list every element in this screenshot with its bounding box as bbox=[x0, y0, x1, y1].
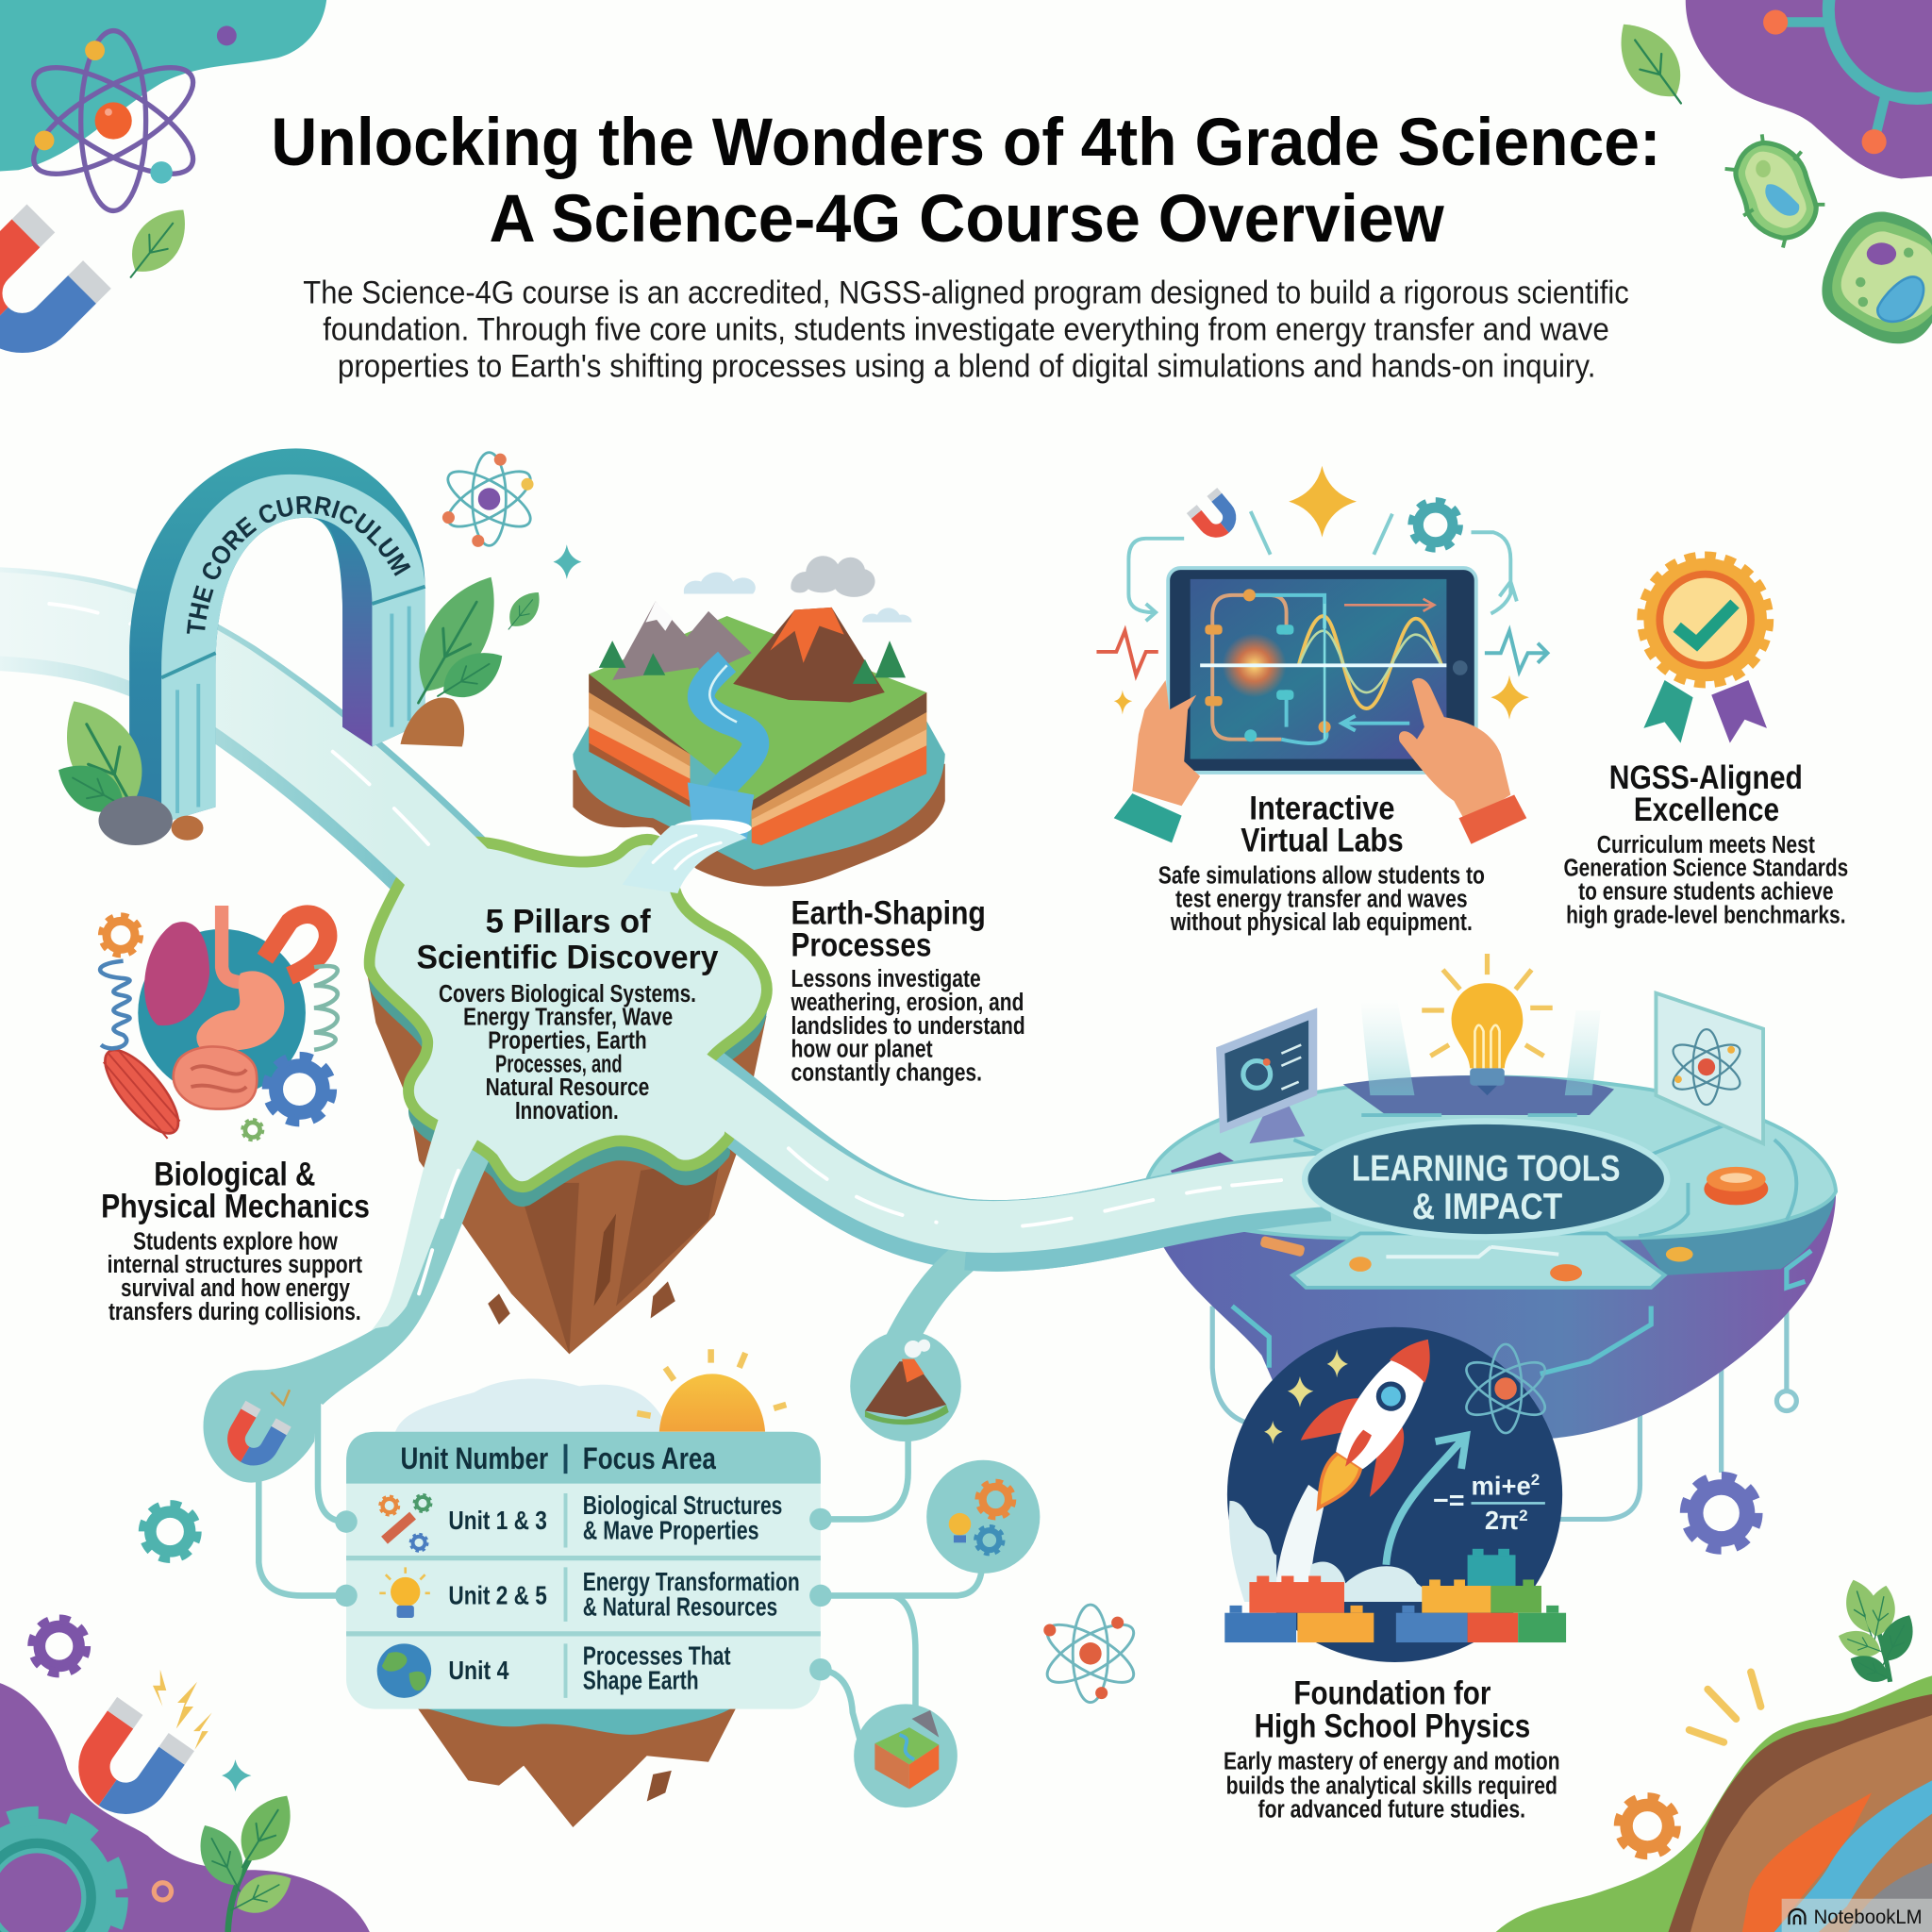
stars bbox=[1264, 1349, 1348, 1444]
heartbeat left bbox=[1096, 631, 1158, 675]
icon: magnet bottom-left bbox=[82, 1706, 181, 1810]
icon: light bulb bbox=[1422, 954, 1553, 1095]
row: unit 4: Unit 4 bbox=[448, 1656, 509, 1685]
icon: sparkle bbox=[553, 544, 581, 579]
atom on rocket scene bbox=[1459, 1344, 1552, 1433]
formula bbox=[1433, 1471, 1545, 1535]
icon: red magnet on organs bbox=[265, 914, 328, 975]
arch: the core curriculum bbox=[129, 448, 426, 821]
text: NGSS-aligned excellence: Excellence bbox=[1634, 791, 1779, 828]
text: foundation for high school physics: High School Physics bbox=[1255, 1708, 1530, 1745]
text: earth-shaping processes: Processes bbox=[791, 927, 931, 964]
text: biological and physical mechanics bbox=[101, 1156, 370, 1325]
text: 5 pillars: Properties, Earth bbox=[488, 1028, 647, 1055]
icon: monitor on platform bbox=[1216, 1008, 1317, 1143]
row: unit 4: Shape Earth bbox=[583, 1666, 699, 1695]
icon: teal gear left bbox=[143, 1505, 196, 1558]
text: NGSS-aligned excellence: high grade-level benchmarks. bbox=[1566, 902, 1846, 928]
text: foundation for high school physics: builds the analytical skills required bbox=[1226, 1774, 1557, 1800]
text: 5 pillars: Natural Resource bbox=[486, 1074, 649, 1101]
intro paragraph: foundation. Through five core units, students investigate everything from energy transfer and wave bbox=[323, 311, 1609, 347]
floating rock under central island bbox=[367, 961, 766, 1354]
floating rock under table bbox=[416, 1707, 737, 1827]
icon: magnet bubble bbox=[204, 1321, 419, 1483]
icon: right spring bbox=[314, 966, 338, 1050]
watermark: NotebookLM: NotebookLM bbox=[1814, 1907, 1923, 1928]
text: interactive virtual labs: Virtual Labs bbox=[1241, 823, 1404, 859]
icon: orange gear bbox=[102, 916, 140, 955]
row: unit 4 bbox=[377, 1641, 731, 1698]
title: A Science-4G Course Overview bbox=[490, 181, 1445, 257]
table: units and focus areas bbox=[335, 1432, 832, 1709]
arch lettering: THE CORE CURRICULUM bbox=[187, 496, 411, 634]
text: interactive virtual labs: Safe simulations allow students to bbox=[1158, 862, 1485, 889]
icon: hanging indigo gear bbox=[1687, 1478, 1757, 1548]
icon: award badge bbox=[1641, 556, 1770, 743]
arrows around tablet bbox=[1128, 511, 1517, 621]
icon: orange gear bottom-right bbox=[1619, 1798, 1675, 1855]
waterfall flow into plateau bbox=[623, 824, 747, 893]
row: unit 1 and 3: Unit 1 & 3 bbox=[448, 1506, 547, 1535]
row: unit 1 and 3: Biological Structures bbox=[583, 1491, 782, 1520]
text: 5 pillars: Energy Transfer, Wave bbox=[463, 1005, 673, 1031]
icon: small green gear bbox=[242, 1120, 262, 1140]
icon: magnet top-left bbox=[0, 218, 97, 349]
text: earth-shaping processes: how our planet bbox=[791, 1037, 933, 1063]
text: earth-shaping processes bbox=[791, 895, 1025, 1086]
icon: volcano bubble bbox=[850, 1331, 961, 1441]
river reaching the platform bbox=[967, 1179, 1328, 1236]
text: NGSS-aligned excellence: NGSS-Aligned bbox=[1609, 759, 1803, 796]
icon: organs bbox=[138, 906, 306, 1109]
text: interactive virtual labs: Interactive bbox=[1249, 791, 1395, 827]
icon: plant bottom-left bbox=[188, 1785, 305, 1932]
connectors from table bbox=[258, 1392, 982, 1740]
hanging ring bbox=[1776, 1391, 1796, 1411]
icon: plants and rock right of arch bbox=[393, 562, 548, 747]
icon: large green cell bbox=[1822, 212, 1932, 343]
left strata bbox=[589, 674, 690, 808]
text: interactive virtual labs bbox=[1158, 791, 1485, 936]
river channels light fill bbox=[0, 604, 1232, 1351]
icon: left spring bbox=[100, 961, 130, 1048]
formula: 2 bbox=[1519, 1507, 1528, 1524]
icon: purple gear left bbox=[32, 1620, 86, 1673]
central oval label: LEARNING TOOLS bbox=[1352, 1148, 1621, 1189]
river channels dark edge bbox=[0, 619, 1232, 1405]
illustration: biological systems bbox=[93, 906, 338, 1144]
corner: top-left teal blob with atom bbox=[0, 0, 326, 210]
icon: blue gear bbox=[268, 1058, 331, 1121]
row: unit 2 and 5: & Natural Resources bbox=[583, 1591, 777, 1621]
icon: rocket scene bbox=[1227, 1311, 1562, 1662]
text: NGSS-aligned excellence bbox=[1563, 759, 1848, 928]
central oval label: & IMPACT bbox=[1412, 1187, 1562, 1227]
text: 5 pillars: Processes, and bbox=[495, 1051, 623, 1077]
text: 5 pillars: Covers Biological Systems. bbox=[439, 981, 696, 1008]
intro paragraph: properties to Earth's shifting processes using a blend of digital simulations and hands-on inquiry. bbox=[338, 349, 1595, 385]
icon: magnet over tablet bbox=[1191, 491, 1235, 536]
rocket bbox=[1274, 1311, 1463, 1531]
hanging lines below platform bbox=[1212, 1306, 1787, 1519]
row: unit 2 and 5: Energy Transformation bbox=[583, 1567, 800, 1596]
text: foundation for high school physics: Foundation for bbox=[1293, 1674, 1491, 1711]
text: biological and physical mechanics: transfers during collisions. bbox=[108, 1299, 361, 1325]
icon: plant bottom-right bbox=[1834, 1575, 1923, 1690]
row: unit 4: Processes That bbox=[583, 1641, 731, 1671]
header row: Unit Number bbox=[400, 1441, 548, 1475]
icon: atom panel bbox=[1656, 993, 1763, 1143]
icon: leaf top-left bbox=[114, 196, 200, 291]
text: 5 pillars: 5 Pillars of bbox=[486, 904, 651, 941]
icon: atom top-left bbox=[19, 31, 208, 210]
corner: top-right purple blob bbox=[1686, 0, 1932, 178]
intro paragraph bbox=[303, 275, 1629, 385]
row: unit 1 and 3 bbox=[380, 1491, 782, 1551]
row: unit 2 and 5: Unit 2 & 5 bbox=[448, 1581, 547, 1610]
left hand bbox=[1114, 680, 1200, 842]
watermark: NotebookLM bbox=[1782, 1899, 1932, 1932]
text: biological and physical mechanics: survival and how energy bbox=[121, 1275, 351, 1302]
icon: terrain bubble bbox=[854, 1704, 958, 1807]
text: foundation for high school physics bbox=[1224, 1674, 1560, 1824]
heartbeat right bbox=[1485, 631, 1547, 672]
central oval label bbox=[1305, 1122, 1667, 1237]
text: biological and physical mechanics: internal structures support bbox=[108, 1252, 362, 1278]
icon: sparkle bottom-left bbox=[222, 1759, 251, 1791]
header row: Focus Area bbox=[583, 1441, 717, 1475]
illustration: earth island with volcano bbox=[573, 556, 945, 887]
icon: small green cell bbox=[1725, 134, 1824, 248]
clouds and exhaust bbox=[1274, 1485, 1325, 1602]
intro paragraph: The Science-4G course is an accredited, NGSS-aligned program designed to build a rigorous scientific bbox=[303, 275, 1629, 310]
icon: leaf top-right bbox=[1604, 9, 1701, 118]
text: 5 pillars bbox=[416, 904, 719, 1124]
terrain top bbox=[589, 616, 926, 801]
icon: muscle bbox=[93, 1040, 190, 1144]
growth arrow bbox=[1386, 1436, 1466, 1565]
icon: atom near arch bbox=[441, 453, 538, 547]
text: earth-shaping processes: constantly changes. bbox=[791, 1059, 982, 1086]
text: interactive virtual labs: test energy transfer and waves bbox=[1175, 886, 1468, 912]
light beams bbox=[1360, 999, 1601, 1095]
formula: 2π bbox=[1485, 1506, 1519, 1535]
formula: 2 bbox=[1531, 1471, 1540, 1489]
formula: mi+e bbox=[1472, 1471, 1531, 1500]
text: NGSS-aligned excellence: Curriculum meets Nest bbox=[1597, 832, 1815, 858]
row: unit 1 and 3: & Mave Properties bbox=[583, 1515, 759, 1544]
icon: building blocks bbox=[1224, 1549, 1566, 1642]
icon: plants and rocks left of arch bbox=[45, 685, 204, 845]
icon: sun bbox=[637, 1349, 786, 1432]
right strata bbox=[752, 692, 926, 845]
text: NGSS-aligned excellence: Generation Science Standards bbox=[1563, 856, 1848, 882]
sparkles bbox=[1114, 675, 1529, 720]
text: NGSS-aligned excellence: to ensure students achieve bbox=[1578, 878, 1834, 905]
formula: −= bbox=[1433, 1486, 1465, 1516]
text: foundation for high school physics: for advanced future studies. bbox=[1258, 1797, 1525, 1824]
text: interactive virtual labs: without physical lab equipment. bbox=[1170, 909, 1473, 936]
plateau under-layer bbox=[370, 859, 767, 1207]
illustration: tablet virtual lab bbox=[1096, 466, 1547, 844]
text: biological and physical mechanics: Students explore how bbox=[133, 1228, 338, 1255]
text: earth-shaping processes: Lessons investigate bbox=[791, 966, 981, 992]
text: earth-shaping processes: Earth-Shaping bbox=[791, 895, 986, 932]
text: earth-shaping processes: weathering, erosion, and bbox=[791, 990, 1024, 1016]
text: earth-shaping processes: landslides to understand bbox=[791, 1013, 1025, 1040]
title bbox=[271, 105, 1661, 257]
icon: teal gear bbox=[1412, 502, 1458, 548]
central plateau: 5 pillars bbox=[370, 840, 767, 1187]
header row bbox=[400, 1441, 717, 1475]
text: biological and physical mechanics: Biological & bbox=[154, 1156, 315, 1192]
text: biological and physical mechanics: Physical Mechanics bbox=[101, 1188, 370, 1224]
tablet bbox=[1168, 568, 1476, 773]
icon: atom lower centre bbox=[1040, 1605, 1141, 1703]
rays bottom-right bbox=[1690, 1672, 1760, 1742]
right hand bbox=[1399, 678, 1526, 844]
corner: bottom-right landscape bbox=[1496, 1675, 1932, 1932]
title: Unlocking the Wonders of 4th Grade Science: bbox=[271, 105, 1661, 180]
icon: gears bubble bbox=[926, 1460, 1040, 1574]
platform: learning tools and impact bbox=[967, 1075, 1836, 1440]
lightning sparks bbox=[153, 1670, 212, 1750]
text: 5 pillars: Scientific Discovery bbox=[416, 940, 719, 976]
corner: bottom-left purple blob with gear bbox=[0, 1683, 370, 1932]
text: foundation for high school physics: Early mastery of energy and motion bbox=[1224, 1749, 1560, 1775]
icon: gold star bbox=[1289, 466, 1357, 537]
row: unit 2 and 5 bbox=[379, 1567, 800, 1621]
cloud behind table bbox=[394, 1379, 672, 1436]
text: 5 pillars: Innovation. bbox=[515, 1098, 619, 1124]
